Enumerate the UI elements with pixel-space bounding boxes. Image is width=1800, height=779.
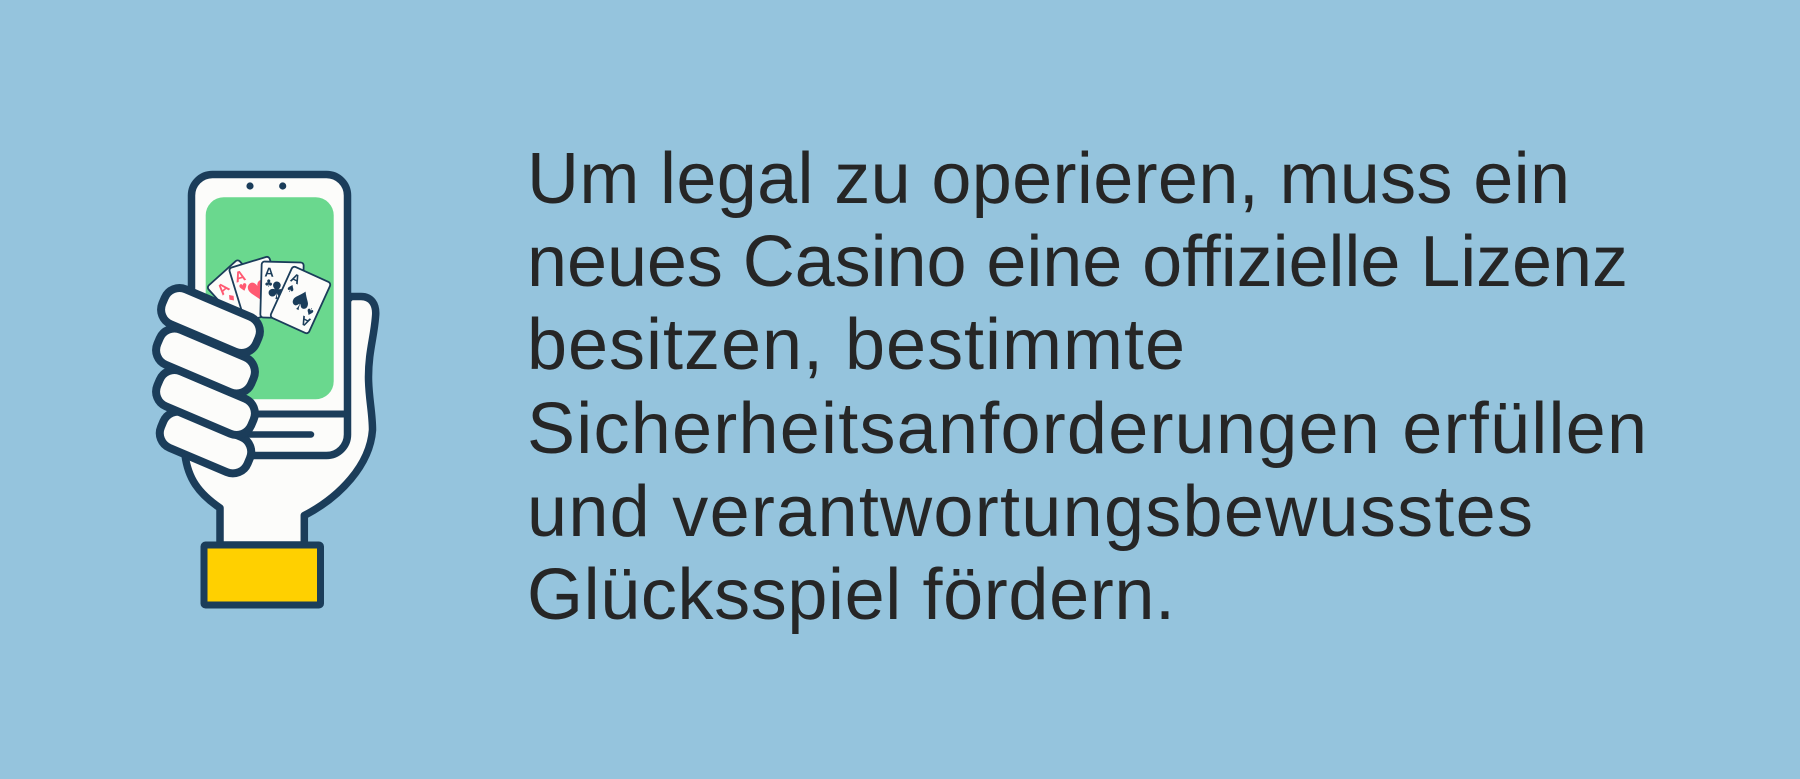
card: ace of diamonds: A bbox=[214, 279, 233, 299]
card: ace of spades: ♠ bbox=[284, 283, 297, 296]
phone camera dots bbox=[246, 182, 286, 190]
playing cards bbox=[207, 256, 331, 334]
card: ace of spades: A bbox=[288, 270, 304, 288]
card: ace of diamonds: ♦ bbox=[225, 291, 239, 306]
card: ace of spades: ♠ bbox=[304, 304, 317, 317]
phone bottom divider bbox=[240, 410, 347, 418]
text block: Glücksspiel fördern. bbox=[527, 555, 1175, 635]
card: ace of spades: ♠ bbox=[283, 283, 318, 321]
card: ace of clubs: ♣ bbox=[264, 279, 273, 290]
icon: hand holding phone with playing cards bbox=[151, 174, 376, 605]
card: ace of hearts: ♥ bbox=[238, 282, 250, 295]
finger: ring bbox=[151, 365, 260, 440]
card: ace of spades bbox=[270, 266, 331, 334]
phone screen bbox=[206, 197, 334, 399]
phone body bbox=[192, 174, 348, 456]
finger: middle bbox=[151, 324, 260, 398]
card: ace of clubs bbox=[260, 261, 304, 319]
finger: little bbox=[155, 407, 256, 478]
finger: index bbox=[156, 283, 265, 358]
card: ace of diamonds bbox=[207, 259, 275, 329]
text block: neues Casino eine offizielle Lizenz bbox=[527, 222, 1628, 302]
hand palm and thumb bbox=[185, 296, 376, 545]
text block: und verantwortungsbewusstes bbox=[527, 472, 1533, 552]
text block: Sicherheitsanforderungen erfüllen bbox=[527, 389, 1647, 469]
text block: Um legal zu operieren, muss ein bbox=[527, 139, 1570, 219]
card: ace of spades: A bbox=[297, 312, 313, 330]
card: ace of hearts: A bbox=[232, 267, 248, 287]
sleeve cuff bbox=[204, 545, 320, 605]
card: ace of hearts: ♥ bbox=[243, 274, 275, 310]
card: ace of clubs: A bbox=[264, 265, 275, 280]
text block bbox=[527, 139, 1647, 635]
card: ace of hearts bbox=[229, 256, 285, 322]
text block: besitzen, bestimmte bbox=[527, 305, 1185, 385]
phone home bar bbox=[240, 431, 311, 438]
card: ace of clubs: ♣ bbox=[266, 277, 288, 305]
